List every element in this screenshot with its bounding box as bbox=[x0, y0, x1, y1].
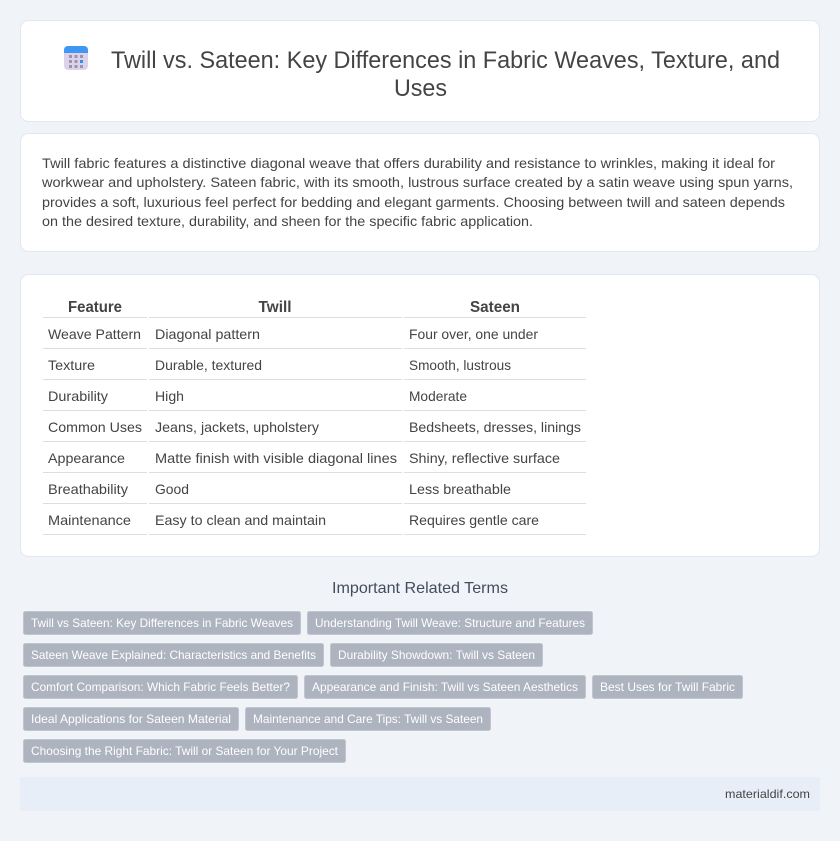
panel: introduction bbox=[20, 134, 820, 252]
tag bbox=[24, 612, 300, 634]
tag bbox=[308, 612, 592, 634]
table row: texture: Durable, textured bbox=[155, 357, 262, 373]
tag bbox=[592, 676, 742, 698]
table row: durability: Moderate bbox=[409, 388, 467, 404]
panel: header bbox=[20, 20, 820, 122]
text block: introduction: workwear and upholstery. Sateen fabric, with its smooth, lustrous surface created by a satin weave using spun yarns, bbox=[41, 174, 793, 190]
table row: breathability: Breathability bbox=[48, 481, 128, 497]
table row: breathability: Good bbox=[155, 481, 189, 497]
text block: introduction: Twill fabric features a distinctive diagonal weave that offers durability and resistance to wrinkles, making it ideal for bbox=[42, 155, 775, 171]
table row: breathability bbox=[48, 481, 511, 497]
tag bbox=[24, 644, 324, 666]
tag bbox=[24, 740, 346, 762]
table row: common uses bbox=[48, 419, 581, 435]
table row: durability: Durability bbox=[48, 388, 108, 404]
table row: weave pattern: Weave Pattern bbox=[48, 326, 141, 342]
tag bbox=[24, 676, 298, 698]
table row: maintenance: Easy to clean and maintain bbox=[155, 512, 326, 528]
table row: appearance: Matte finish with visible diagonal lines bbox=[155, 450, 397, 466]
table row: durability bbox=[48, 388, 467, 404]
table row: appearance: Shiny, reflective surface bbox=[409, 450, 560, 466]
table row: durability: High bbox=[155, 388, 184, 404]
footer bbox=[20, 777, 820, 811]
table row: weave pattern: Diagonal pattern bbox=[155, 326, 260, 342]
title: Uses bbox=[394, 75, 447, 102]
tag bbox=[246, 708, 490, 730]
panel: comparison table bbox=[20, 274, 820, 556]
table row: weave pattern: Four over, one under bbox=[409, 326, 538, 342]
table row: texture: Texture bbox=[48, 357, 95, 373]
tag bbox=[304, 676, 586, 698]
tag: Twill vs Sateen: Key Differences in Fabric Weaves bbox=[31, 616, 293, 630]
title: Twill vs. Sateen: Key Differences in Fabric Weaves, Texture, and bbox=[111, 47, 780, 74]
table row: appearance: Appearance bbox=[48, 450, 125, 466]
table header: Sateen bbox=[470, 299, 520, 316]
table row: common uses: Common Uses bbox=[48, 419, 142, 435]
table header: Feature bbox=[68, 299, 122, 316]
tag: Ideal Applications for Sateen Material bbox=[31, 712, 231, 726]
table row: appearance bbox=[48, 450, 560, 466]
tag: Sateen Weave Explained: Characteristics and Benefits bbox=[31, 648, 316, 662]
tag: Choosing the Right Fabric: Twill or Sateen for Your Project bbox=[31, 744, 339, 758]
tag: Best Uses for Twill Fabric bbox=[600, 680, 735, 694]
tag: Comfort Comparison: Which Fabric Feels Better? bbox=[31, 680, 290, 694]
table header bbox=[68, 299, 520, 316]
tag bbox=[330, 644, 542, 666]
table row: common uses: Bedsheets, dresses, linings bbox=[409, 419, 581, 435]
text block: introduction: provides a soft, luxurious feel perfect for bedding and elegant garments. Choosing between twill and sateen depends bbox=[42, 194, 785, 210]
table row: breathability: Less breathable bbox=[409, 481, 511, 497]
table row: maintenance: Maintenance bbox=[48, 512, 131, 528]
table row: maintenance: Requires gentle care bbox=[409, 512, 539, 528]
tag: Durability Showdown: Twill vs Sateen bbox=[338, 648, 535, 662]
table row: texture: Smooth, lustrous bbox=[409, 357, 511, 373]
tag bbox=[24, 708, 238, 730]
footer: materialdif.com bbox=[725, 787, 810, 801]
tag: Maintenance and Care Tips: Twill vs Sateen bbox=[253, 712, 483, 726]
table row: weave pattern bbox=[48, 326, 538, 342]
related term tags bbox=[24, 612, 742, 762]
table header: Twill bbox=[258, 299, 292, 316]
icon: calendar grid bbox=[64, 46, 88, 70]
text block: introduction: on the desired texture, durability, and sheen for the specific fabric application. bbox=[42, 213, 533, 229]
table row: maintenance bbox=[48, 512, 539, 528]
table row: texture bbox=[48, 357, 511, 373]
table row: common uses: Jeans, jackets, upholstery bbox=[155, 419, 319, 435]
tag: Understanding Twill Weave: Structure and Features bbox=[315, 616, 585, 630]
tag: Appearance and Finish: Twill vs Sateen Aesthetics bbox=[312, 680, 578, 694]
heading: important related terms: Important Related Terms bbox=[332, 580, 508, 597]
